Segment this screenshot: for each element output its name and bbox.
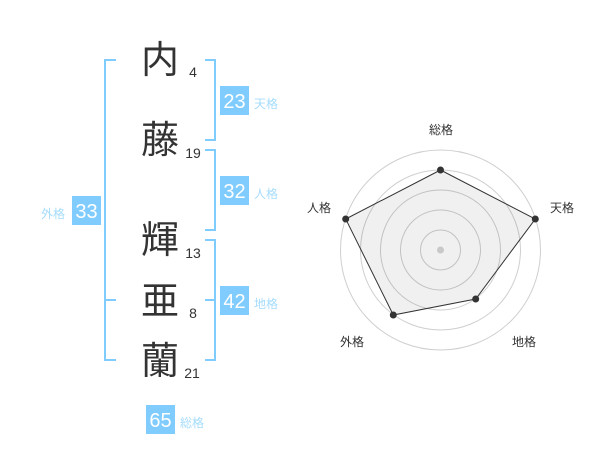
- person score badge: 32: 32: [223, 181, 246, 203]
- radar chart: 外格: [340, 334, 364, 349]
- name kanji: 亜: 亜: [141, 281, 179, 323]
- stroke count: 13: 13: [185, 245, 201, 261]
- stroke count: 21: 21: [184, 365, 200, 381]
- earth score badge: 42: 42: [223, 291, 246, 313]
- label: 外格: 外格: [41, 207, 65, 221]
- person score badge: 32: [220, 176, 249, 205]
- radar chart: 人格: [307, 200, 331, 215]
- heaven score badge: 23: [220, 86, 249, 115]
- label: 天格: 天格: [254, 97, 278, 111]
- earth score badge: 42: [220, 286, 249, 315]
- radar chart: 総格: [429, 122, 453, 137]
- radar chart: 天格: [550, 200, 574, 215]
- name kanji: 蘭: 蘭: [141, 341, 179, 383]
- total score badge: 65: [146, 405, 175, 434]
- label: 総格: 総格: [180, 416, 204, 430]
- name kanji: 藤: 藤: [141, 120, 179, 162]
- heaven score badge: 23: 23: [223, 91, 246, 113]
- outer score badge: 33: 33: [75, 201, 98, 223]
- radar chart: 地格: [512, 334, 536, 349]
- total score badge: 65: 65: [149, 410, 172, 432]
- outer score badge: 33: [72, 196, 101, 225]
- stroke count: 8: 8: [189, 305, 197, 321]
- label: 地格: 地格: [254, 297, 278, 311]
- name kanji: 輝: 輝: [141, 220, 179, 262]
- name kanji: 内: 内: [141, 40, 179, 82]
- label: 人格: 人格: [254, 187, 278, 201]
- stroke count: 4: 4: [189, 64, 197, 80]
- stroke count: 19: 19: [185, 145, 201, 161]
